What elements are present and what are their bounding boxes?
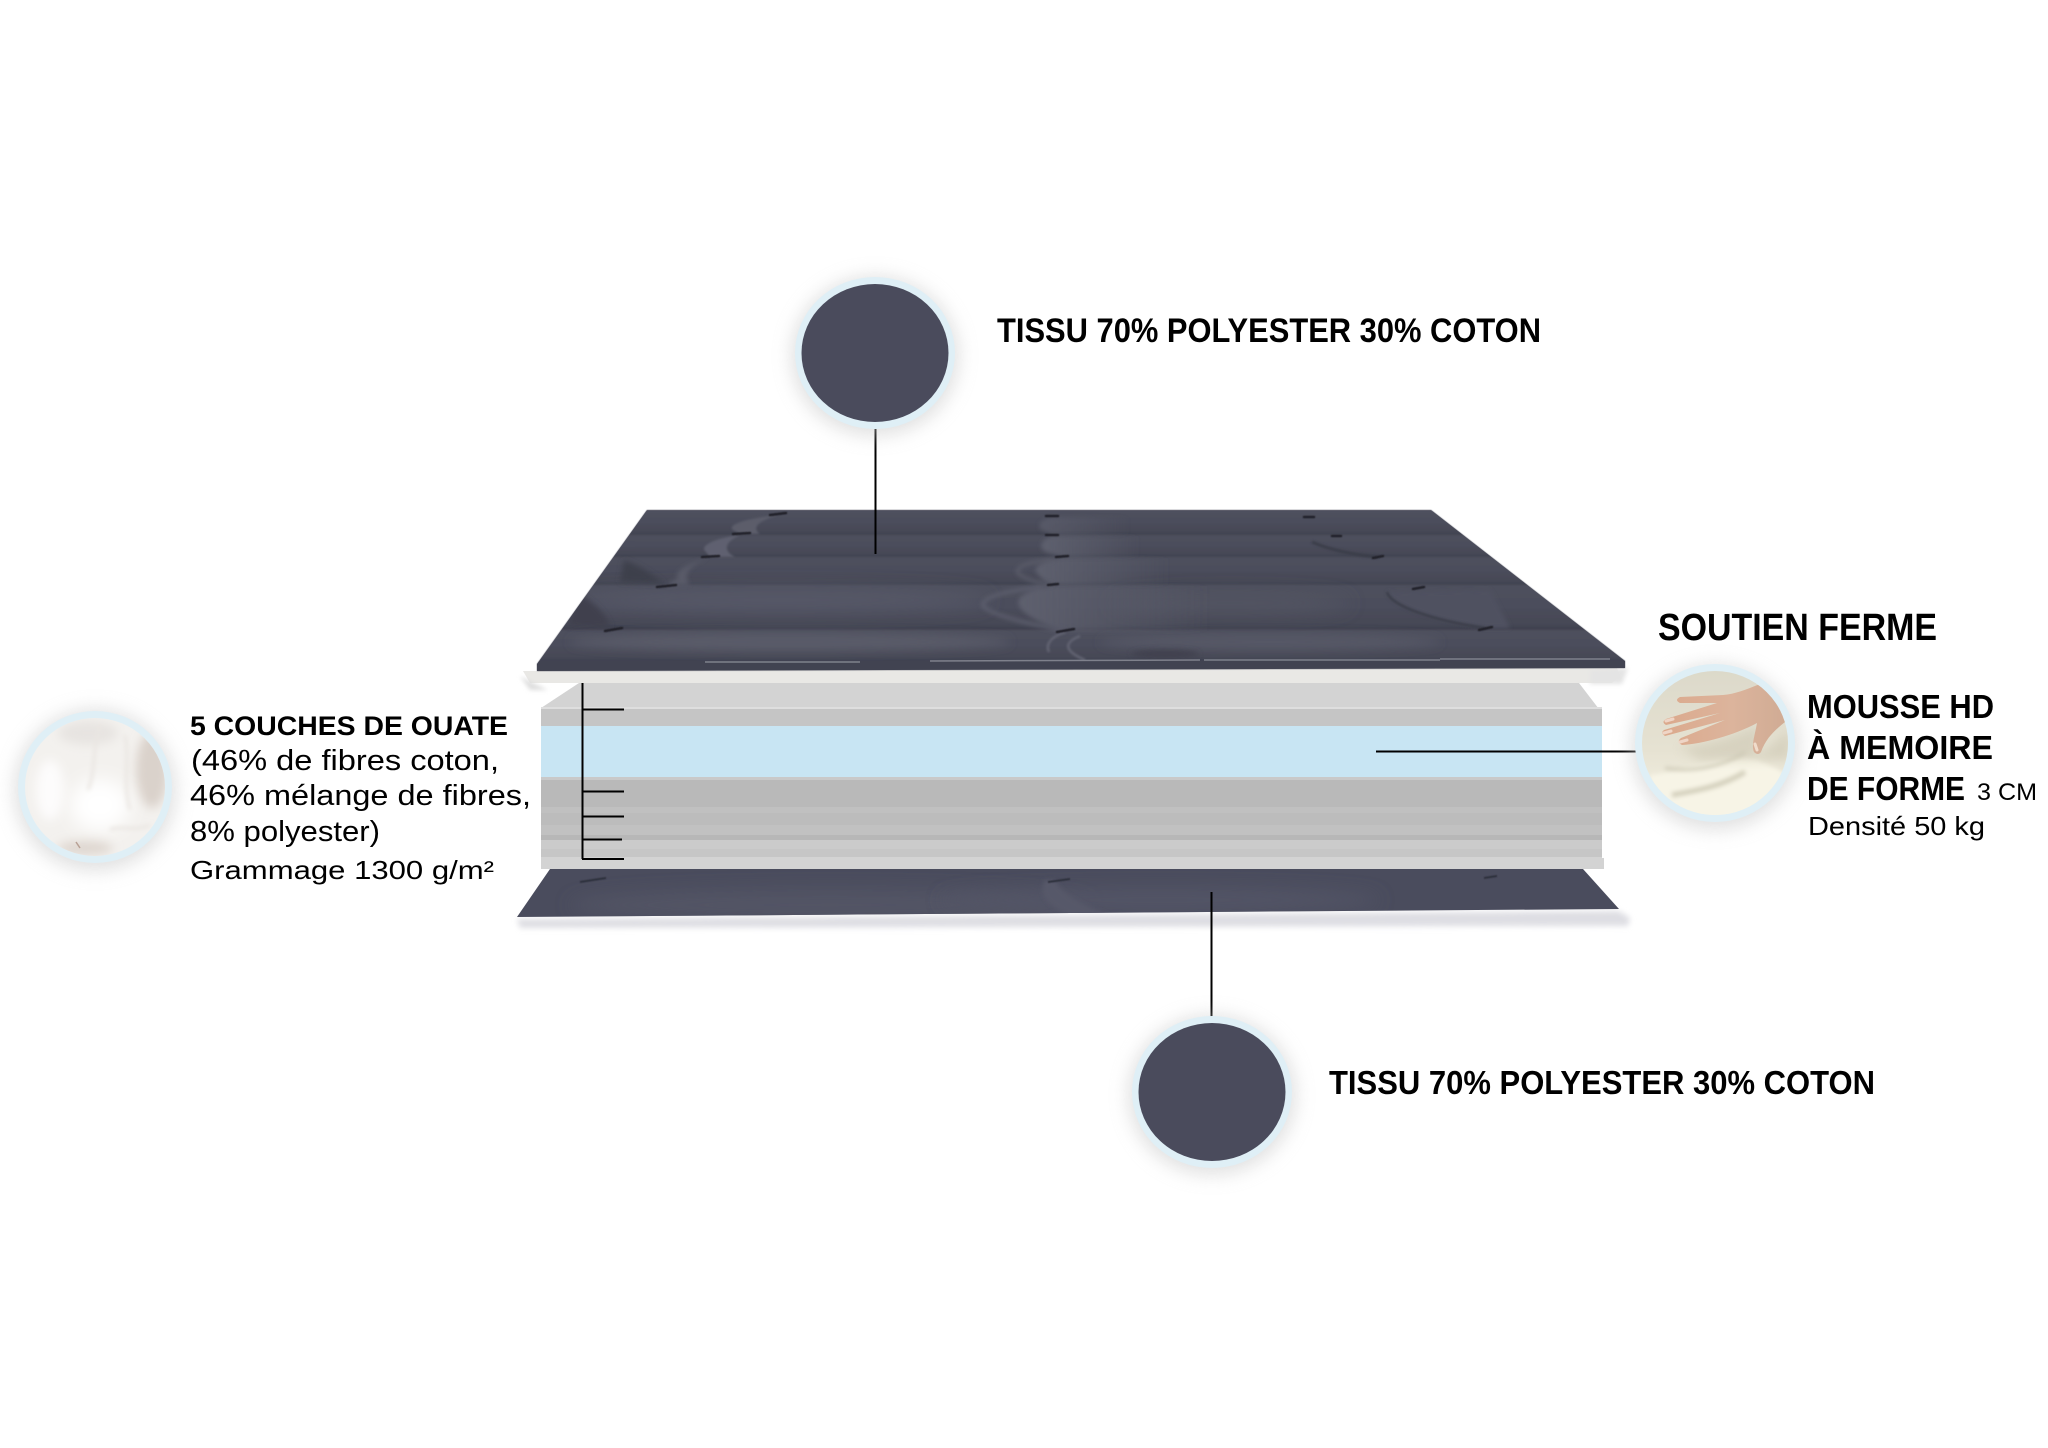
quilted rows [500,510,1670,662]
pillow highlights [635,594,925,610]
top quilted fabric [500,510,1670,672]
callout lines [582,429,1640,1017]
foam and batting layers [541,683,1604,869]
heading: firm support: SOUTIEN FERME [1658,607,1937,649]
memory foam heading: DE FORME [1807,770,1965,807]
heading: bottom fabric composition: TISSU 70% POLYESTER 30% COTON [1329,1064,1875,1101]
memory foam blue layer [541,726,1602,777]
text block: memory foam [1807,688,2037,841]
centre tuft crescents [1018,587,1156,630]
icon: top fabric swatch [791,276,959,436]
left tuft crescents [732,516,770,534]
icon: memory foam with hand [1631,664,1800,830]
icon: cotton batting [14,709,176,871]
bottom quilted fabric [517,869,1619,921]
memory foam density: Densité 50 kg [1808,811,1985,841]
mattress cross-section [500,510,1670,928]
white edge band under top fabric [523,668,1620,683]
heading: top fabric composition: TISSU 70% POLYESTER 30% COTON [997,312,1541,350]
batting heading: 5 COUCHES DE OUATE [190,711,508,741]
bottom rim [537,661,1625,671]
memory foam heading: MOUSSE HD [1807,688,1994,725]
batting composition [190,745,531,848]
batting weight: Grammage 1300 g/m² [190,855,494,885]
hand [1662,684,1785,754]
memory foam heading: À MEMOIRE [1807,729,1993,766]
right tuft crescents [1312,542,1378,557]
text block: batting layers [190,711,531,885]
batting composition: 46% mélange de fibres, [190,780,531,812]
memory foam thickness: 3 CM [1977,779,2037,806]
memory foam heading [1807,688,1994,807]
icon: bottom fabric swatch [1128,1015,1296,1175]
batting composition: 8% polyester) [190,816,380,848]
bottom fabric shadow [517,911,1630,928]
hand shadow [1688,729,1788,763]
batting composition: (46% de fibres coton, [191,745,499,777]
tufting points [605,513,1492,632]
